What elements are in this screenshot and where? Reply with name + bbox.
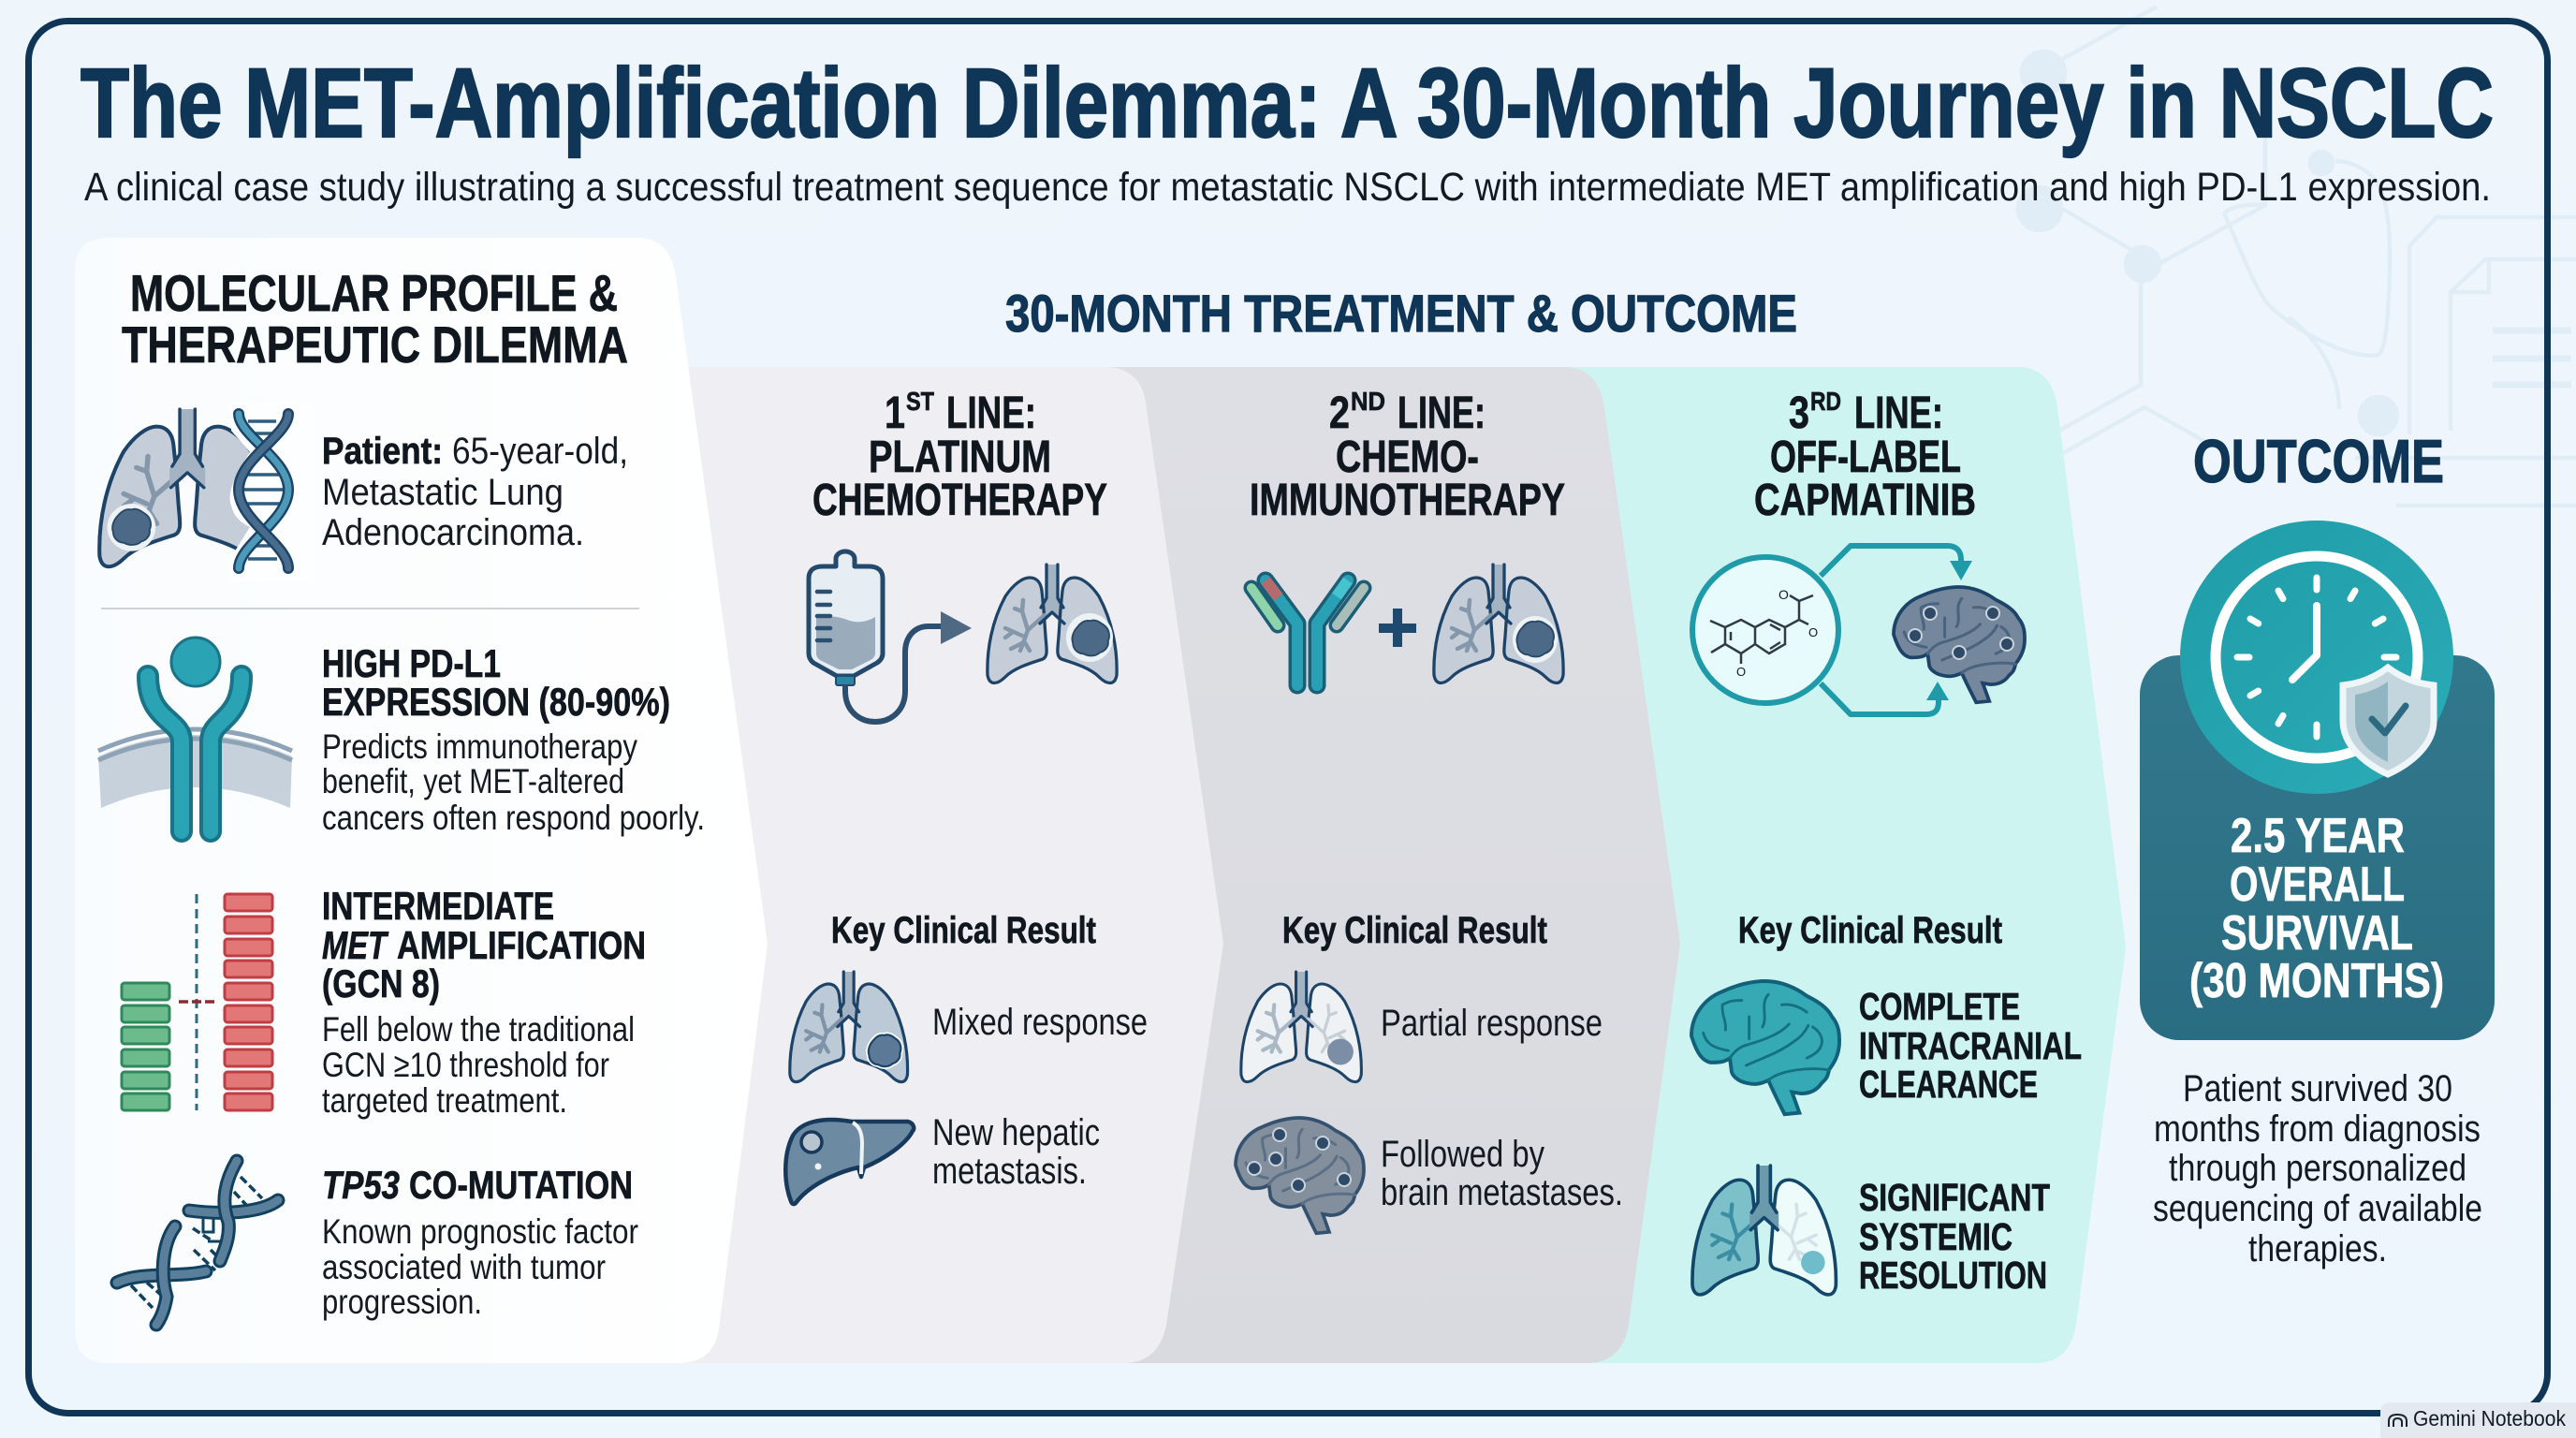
survival statistic: OVERALL — [2230, 858, 2405, 912]
text: intermediate MET amplification: GCN ≥10 threshold for — [322, 1046, 609, 1084]
MET amplification block — [122, 884, 646, 1120]
text: significant systemic resolution: SIGNIFICANT — [1859, 1176, 2050, 1219]
result: mixed response — [790, 972, 1148, 1082]
third line heading: RD — [1810, 387, 1841, 416]
result: systemic resolution — [1692, 1166, 2050, 1297]
text: patient details: Patient: — [322, 431, 443, 472]
text: intermediate MET amplification: MET — [322, 923, 389, 967]
outcome description: through personalized — [2169, 1148, 2466, 1189]
text: patient details: Metastatic Lung — [322, 472, 564, 513]
panel: outcome — [2140, 427, 2495, 1269]
result: brain metastases — [1236, 1118, 1623, 1233]
outcome description: sequencing of available — [2153, 1188, 2482, 1229]
icon: recovering lung — [1692, 1166, 1836, 1295]
third line heading: LINE: — [1854, 389, 1943, 438]
watermark: Gemini Notebook — [2380, 1402, 2576, 1438]
text: high PD-L1 expression: HIGH PD-L1 — [322, 641, 501, 685]
outcome heading: OUTCOME — [2193, 427, 2444, 495]
icon: IV bag to lung — [809, 551, 1117, 722]
second line heading: LINE: — [1398, 389, 1486, 438]
text: partial response: Partial response — [1381, 1003, 1603, 1044]
outcome description: Patient survived 30 — [2183, 1068, 2452, 1109]
result: intracranial clearance — [1691, 981, 2082, 1114]
first line heading: 1 — [885, 389, 905, 438]
text: significant systemic resolution: RESOLUTION — [1859, 1254, 2047, 1297]
third line heading: OFF-LABEL — [1770, 433, 1961, 482]
text: patient details: Adenocarcinoma. — [322, 512, 584, 553]
survival statistic: SURVIVAL — [2221, 906, 2413, 961]
panel: second line chemo-immunotherapy — [1076, 367, 1680, 1363]
icon: liver — [785, 1120, 914, 1204]
icon: lung with tumor — [790, 972, 908, 1082]
PD-L1 block — [98, 638, 705, 837]
first line heading: CHEMOTHERAPY — [812, 476, 1107, 525]
text: high PD-L1 expression: Predicts immunotherapy — [322, 727, 637, 766]
survival statistic: 2.5 YEAR — [2231, 809, 2405, 863]
key result heading: second line: Key Clinical Result — [1282, 910, 1547, 951]
panel: molecular profile and therapeutic dilemma — [75, 238, 768, 1363]
text: high PD-L1 expression: benefit, yet MET-altered — [322, 762, 624, 800]
text: complete intracranial clearance: CLEARANCE — [1859, 1063, 2038, 1106]
text: new hepatic metastasis: New hepatic — [932, 1112, 1100, 1153]
panel heading: THERAPEUTIC DILEMMA — [122, 315, 628, 374]
panel: third line capmatinib — [1544, 367, 2126, 1363]
text: intermediate MET amplification: AMPLIFICATION — [397, 923, 646, 967]
icon: molecule targeting brain: O — [1778, 587, 1789, 602]
text: high PD-L1 expression: EXPRESSION (80-90%) — [322, 680, 670, 724]
icon: partially cleared lung — [1241, 972, 1361, 1082]
panel shape: molecular profile — [75, 238, 768, 1363]
second line heading: CHEMO- — [1336, 433, 1479, 482]
text: TP53 co-mutation — [322, 1163, 638, 1321]
text: intermediate MET amplification: (GCN 8) — [322, 961, 440, 1005]
section heading: treatment and outcome: 30-MONTH TREATMENT & OUTCOME — [1005, 284, 1797, 343]
text: complete intracranial clearance — [1859, 985, 2082, 1106]
first line heading — [812, 387, 1107, 525]
text: new hepatic metastasis: metastasis. — [932, 1151, 1087, 1192]
text: TP53 co-mutation: progression. — [322, 1283, 482, 1321]
text: TP53 co-mutation: associated with tumor — [322, 1248, 606, 1286]
outcome description: months from diagnosis — [2154, 1108, 2481, 1150]
text: followed by brain metastases: Followed by — [1381, 1134, 1544, 1175]
key result heading: third line: Key Clinical Result — [1738, 910, 2002, 951]
panel shape: third line — [1544, 367, 2126, 1363]
icon: PD-L1 receptor — [98, 638, 292, 831]
third line heading — [1754, 387, 1976, 525]
text: significant systemic resolution: SYSTEMIC — [1859, 1215, 2012, 1258]
text: patient details: 65-year-old, — [452, 431, 628, 472]
text: high PD-L1 expression — [322, 641, 705, 837]
icon: antibody plus lung — [1251, 565, 1563, 685]
text: high PD-L1 expression: cancers often respond poorly. — [322, 799, 705, 837]
icon: lung and DNA — [99, 403, 314, 582]
text: TP53 co-mutation: TP53 — [322, 1163, 400, 1207]
text: intermediate MET amplification: targeted treatment. — [322, 1081, 567, 1120]
icon: molecule targeting brain: O — [1808, 625, 1818, 639]
text: intermediate MET amplification — [322, 884, 646, 1120]
second line heading — [1250, 387, 1565, 525]
icon: teal brain — [1691, 981, 1839, 1114]
survival card — [2140, 655, 2495, 1040]
result: partial response — [1241, 972, 1603, 1082]
text: intermediate MET amplification: INTERMEDIATE — [322, 884, 554, 928]
first line heading: PLATINUM — [869, 433, 1051, 482]
first line heading: ST — [906, 387, 934, 416]
first line heading: LINE: — [946, 389, 1036, 438]
text: mixed response: Mixed response — [932, 1002, 1148, 1043]
result: new hepatic metastasis — [785, 1112, 1100, 1204]
outcome description — [2153, 1068, 2482, 1269]
patient block — [99, 403, 628, 582]
outcome description: therapies. — [2248, 1228, 2387, 1269]
text: TP53 co-mutation: Known prognostic factor — [322, 1212, 638, 1251]
text: complete intracranial clearance: INTRACRANIAL — [1859, 1024, 2082, 1067]
icon: mutated DNA — [117, 1161, 278, 1325]
text: TP53 co-mutation: CO-MUTATION — [409, 1163, 633, 1207]
text: followed by brain metastases — [1381, 1134, 1623, 1213]
icon: clock with shield — [2180, 521, 2453, 794]
panel shape: second line — [1076, 367, 1680, 1363]
text: followed by brain metastases: brain metastases. — [1381, 1172, 1623, 1213]
third line heading: 3 — [1789, 389, 1809, 438]
panel heading: MOLECULAR PROFILE & — [130, 264, 618, 322]
icon: molecule targeting brain — [1692, 546, 2025, 714]
TP53 block — [117, 1161, 638, 1325]
panel heading — [122, 264, 628, 374]
panel: first line platinum chemotherapy — [655, 367, 1223, 1363]
text: intermediate MET amplification: Fell below the traditional — [322, 1010, 635, 1049]
survival statistic: (30 MONTHS) — [2189, 954, 2444, 1008]
icon: molecule targeting brain: O — [1736, 665, 1746, 679]
text: complete intracranial clearance: COMPLETE — [1859, 985, 2020, 1028]
second line heading: ND — [1351, 387, 1385, 416]
third line heading: CAPMATINIB — [1754, 476, 1976, 525]
panel shape: first line — [655, 367, 1223, 1363]
key result heading: first line: Key Clinical Result — [831, 910, 1096, 951]
watermark: Gemini Notebook: Gemini Notebook — [2413, 1406, 2566, 1431]
icon: gene copy bars — [122, 894, 272, 1110]
icon: brain with metastases — [1236, 1118, 1364, 1233]
text: significant systemic resolution — [1859, 1176, 2050, 1297]
text: patient details — [322, 431, 628, 553]
second line heading: 2 — [1329, 389, 1350, 438]
text: new hepatic metastasis — [932, 1112, 1100, 1192]
second line heading: IMMUNOTHERAPY — [1250, 476, 1565, 525]
survival statistic — [2189, 809, 2444, 1008]
